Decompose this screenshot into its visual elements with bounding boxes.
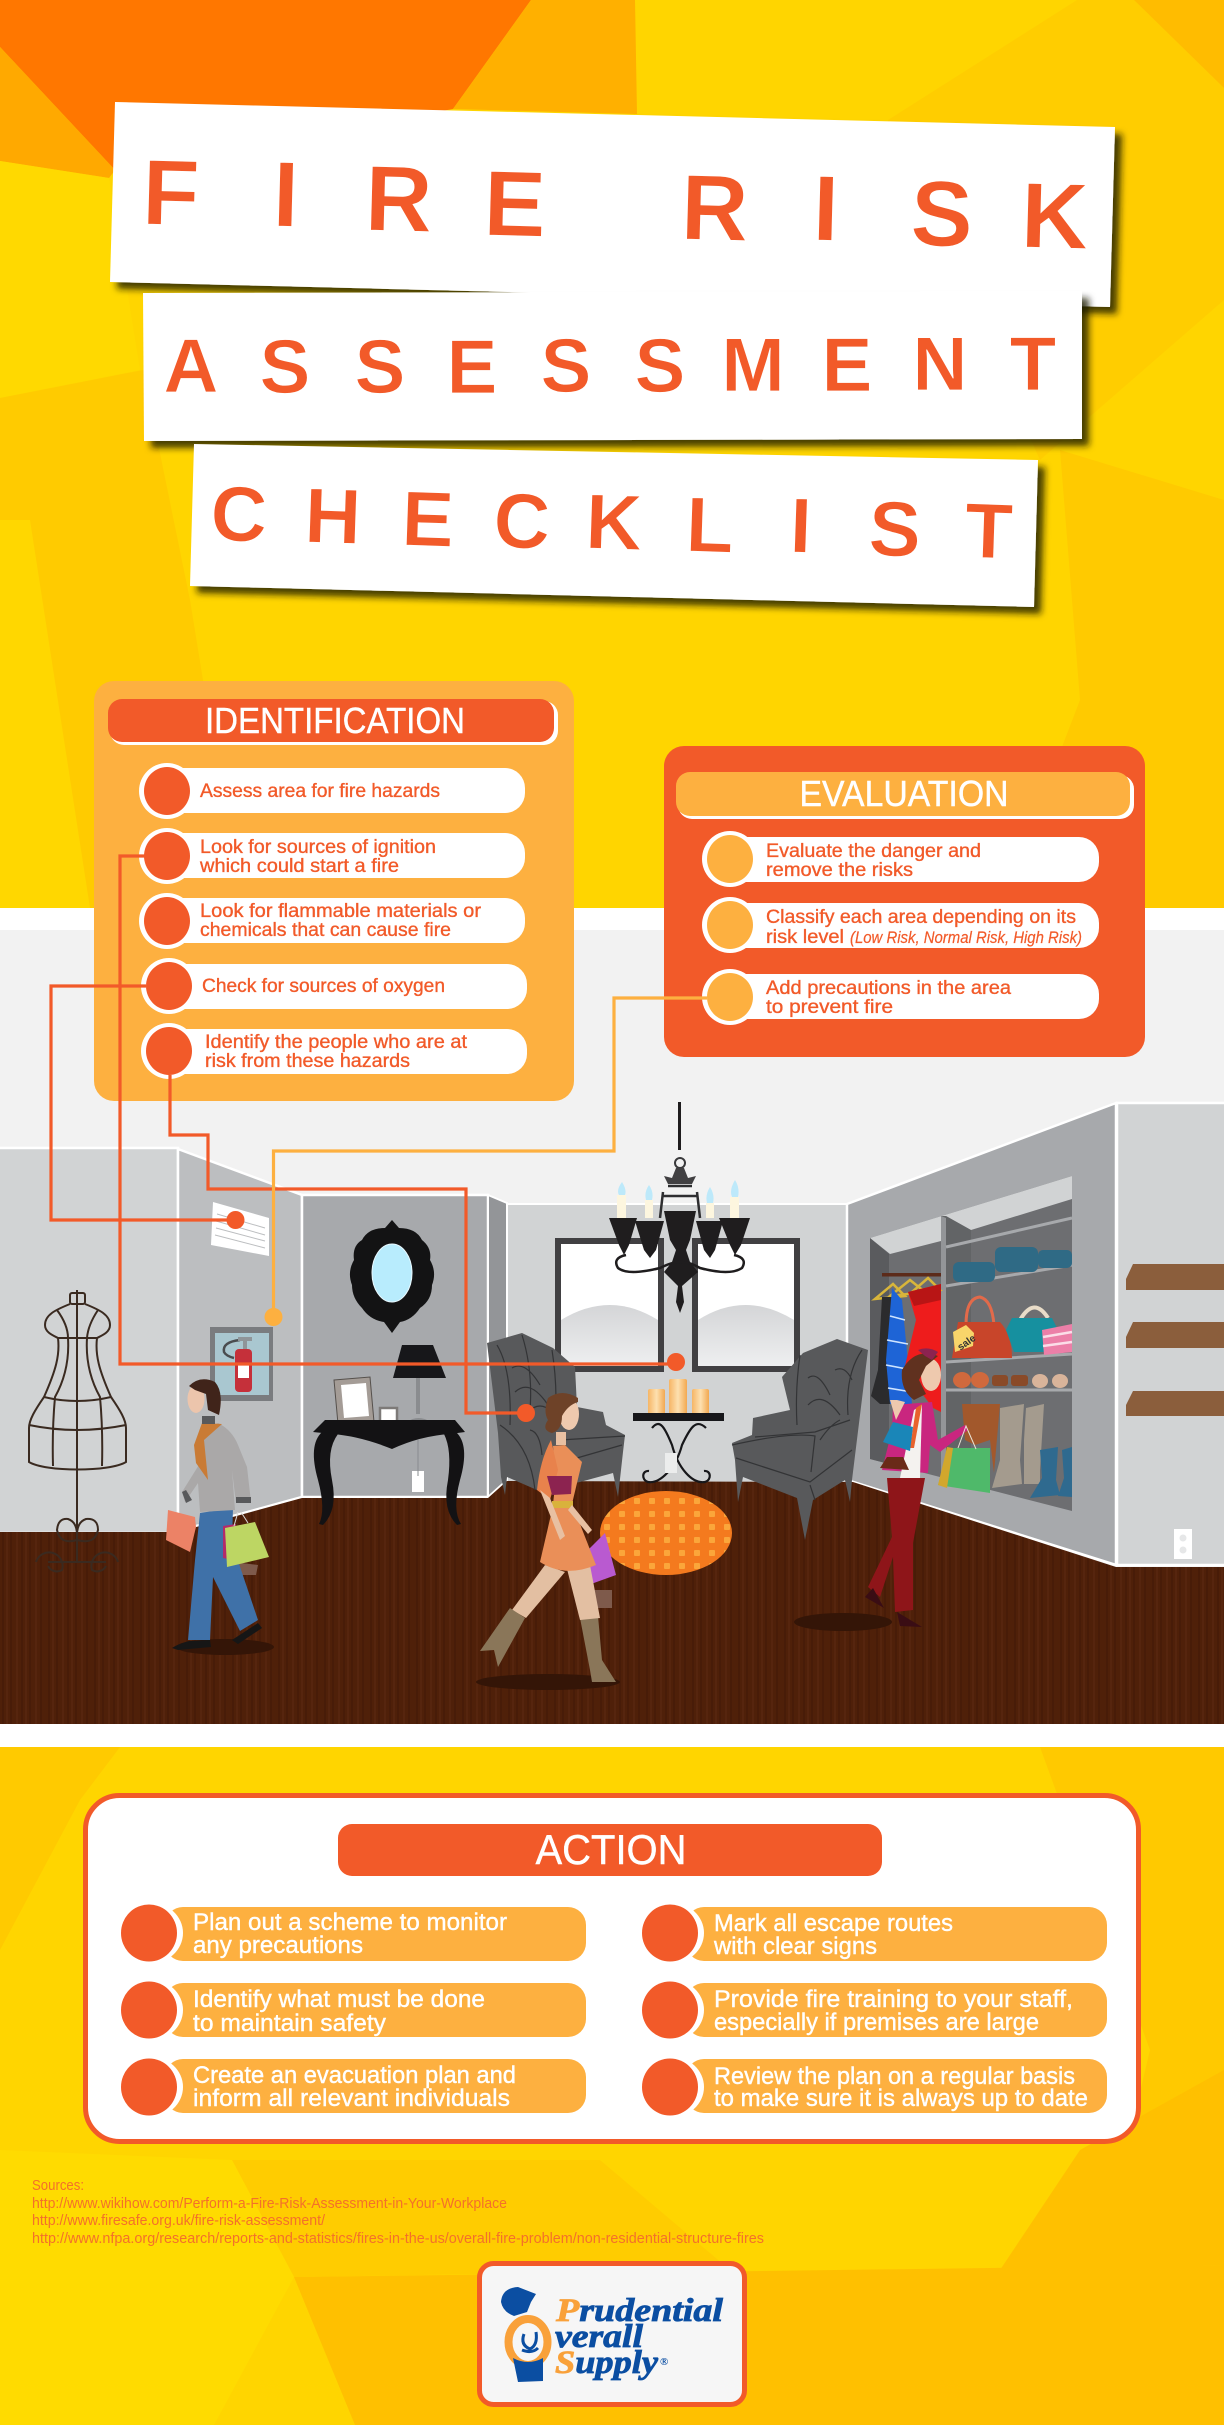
- logo wordmark: Supply: [555, 2345, 658, 2381]
- sources: http://www.nfpa.org/research/reports-and-statistics/fires-in-the-us/overall-fire-problem/non-residential-structure-fires: [32, 2230, 764, 2247]
- side return: [488, 1195, 507, 1497]
- heading: evaluation: EVALUATION: [800, 773, 1008, 814]
- item: ignition: [139, 828, 525, 884]
- action: fire training: especially if premises are large: [714, 2009, 1039, 2036]
- item: precautions: Add precautions in the area: [766, 977, 1011, 999]
- pink towels: [1042, 1324, 1072, 1355]
- action: escape routes: Mark all escape routes: [714, 1910, 953, 1937]
- picture frames: [334, 1377, 397, 1427]
- action: fire training: Provide fire training to your staff,: [714, 1986, 1073, 2013]
- item: ignition: which could start a fire: [199, 855, 399, 877]
- logo: [480, 2264, 744, 2404]
- windows: [558, 1241, 797, 1369]
- item: classify: (Low Risk, Normal Risk, High Risk): [850, 928, 1082, 947]
- sale tag: sale: [956, 1333, 978, 1353]
- action: maintain safety: Identify what must be done: [193, 1986, 485, 2013]
- item: assess area: [139, 763, 525, 819]
- room upper wall: [0, 908, 1224, 1724]
- notice on wall: [211, 1202, 269, 1256]
- item: evaluate danger: Evaluate the danger and: [766, 840, 981, 862]
- action: review plan: Review the plan on a regular basis: [714, 2063, 1075, 2090]
- chair right: [732, 1339, 868, 1540]
- item: classify: Classify each area depending on its: [766, 906, 1076, 928]
- mirror: [350, 1220, 434, 1333]
- folded towels: [953, 1247, 1072, 1282]
- item: evaluate danger: [702, 831, 1099, 887]
- mannequin: [29, 1290, 126, 1571]
- hanging rod and hangers: [875, 1273, 941, 1299]
- rug: [600, 1491, 732, 1575]
- connector: oxygen to notice: [51, 986, 244, 1229]
- red handbag: [952, 1297, 1012, 1358]
- centre wall: [507, 1204, 847, 1486]
- item: precautions: [702, 969, 1099, 1025]
- connector: people to shopper: [170, 1075, 535, 1422]
- item: ignition: Look for sources of ignition: [200, 836, 436, 858]
- sources: Sources:: [32, 2177, 84, 2194]
- item: oxygen: Check for sources of oxygen: [202, 975, 445, 997]
- action: evacuation plan: inform all relevant individuals: [193, 2085, 510, 2112]
- action: evacuation plan: [115, 2056, 586, 2118]
- panel: evaluation: [664, 746, 1145, 1057]
- chandelier: [609, 1102, 750, 1313]
- item: assess area: Assess area for fire hazards: [200, 780, 440, 802]
- woman in magenta jacket: [794, 1348, 990, 1631]
- fire extinguisher case: [210, 1327, 273, 1401]
- logo wordmark: Prudential: [555, 2293, 724, 2329]
- action: maintain safety: to maintain safety: [193, 2010, 386, 2037]
- title banner: Assessment: ASSESSMENT: [164, 322, 1056, 410]
- action: review plan: to make sure it is always up to date: [714, 2085, 1088, 2112]
- angled wall: [178, 1149, 302, 1531]
- panel: action: [86, 1796, 1138, 2142]
- logo wordmark: ®: [660, 2356, 668, 2368]
- item: people at risk: Identify the people who are at: [205, 1031, 468, 1053]
- sale tag: [953, 1325, 978, 1353]
- closet: [870, 1176, 1072, 1511]
- closet wall: [847, 1103, 1116, 1565]
- left wall: [0, 1148, 178, 1533]
- title banner: Checklist: [190, 444, 1038, 607]
- man with bags: [166, 1379, 274, 1655]
- wall outlet: [412, 1440, 424, 1492]
- wall shelves: [1126, 1264, 1224, 1416]
- sources: http://www.firesafe.org.uk/fire-risk-assessment/: [32, 2212, 326, 2229]
- title banner: Assessment: [143, 291, 1082, 441]
- right outlet: [1174, 1529, 1192, 1559]
- title banner: Checklist: CHECKLIST: [209, 469, 1014, 576]
- woman in orange dress: [476, 1393, 620, 1690]
- room scene: [0, 908, 1224, 1747]
- boots: [962, 1404, 1072, 1498]
- item: people at risk: risk from these hazards: [205, 1050, 410, 1072]
- sunglasses: [953, 1372, 1068, 1388]
- heading: identification: IDENTIFICATION: [205, 700, 465, 741]
- chair left: [487, 1333, 625, 1497]
- title banner: Fire Risk: [110, 102, 1115, 307]
- heading: action: ACTION: [536, 1826, 686, 1873]
- item: flammable materials: [139, 893, 525, 949]
- action: escape routes: with clear signs: [713, 1933, 877, 1960]
- logo wordmark: verall: [555, 2319, 644, 2355]
- console table: [313, 1420, 465, 1525]
- item: classify: risk level: [766, 926, 844, 948]
- action: plan scheme: Plan out a scheme to monitor: [193, 1909, 507, 1936]
- action: fire training: [636, 1979, 1107, 2041]
- wood floor: [0, 1481, 1224, 1724]
- title banner: Fire Risk: FIRE RISK: [141, 140, 1090, 269]
- heading: identification: [108, 699, 558, 745]
- action: escape routes: [636, 1902, 1107, 1964]
- connector: precautions to extinguisher: [264, 998, 707, 1326]
- item: people at risk: [141, 1023, 527, 1079]
- action: maintain safety: [115, 1979, 586, 2041]
- action: plan scheme: any precautions: [193, 1932, 363, 1959]
- wall outlet behind table: [665, 1453, 677, 1473]
- heading: action: [338, 1824, 882, 1876]
- item: precautions: to prevent fire: [766, 996, 893, 1018]
- item: classify: [702, 897, 1099, 953]
- candle table: [633, 1379, 724, 1482]
- sources: http://www.wikihow.com/Perform-a-Fire-Risk-Assessment-in-Your-Workplace: [32, 2195, 507, 2212]
- dresses: [871, 1284, 941, 1412]
- heading: evaluation: [676, 772, 1134, 819]
- right wall: [1117, 1103, 1224, 1565]
- action: evacuation plan: Create an evacuation plan and: [193, 2062, 516, 2089]
- item: flammable materials: chemicals that can cause fire: [200, 919, 451, 941]
- logo wordmark: [555, 2293, 724, 2381]
- action: review plan: [636, 2056, 1107, 2118]
- connector: ignition to candles: [120, 856, 685, 1371]
- table lamp: [393, 1345, 446, 1422]
- sources: [32, 2177, 764, 2247]
- panel: identification: [94, 681, 574, 1101]
- logo icon: [501, 2287, 548, 2382]
- action: plan scheme: [115, 1902, 586, 1964]
- back wall dark: [302, 1195, 488, 1497]
- item: oxygen: [141, 958, 527, 1014]
- item: evaluate danger: remove the risks: [766, 859, 913, 881]
- teal handbag: [1006, 1307, 1058, 1352]
- item: flammable materials: Look for flammable materials or: [200, 900, 482, 922]
